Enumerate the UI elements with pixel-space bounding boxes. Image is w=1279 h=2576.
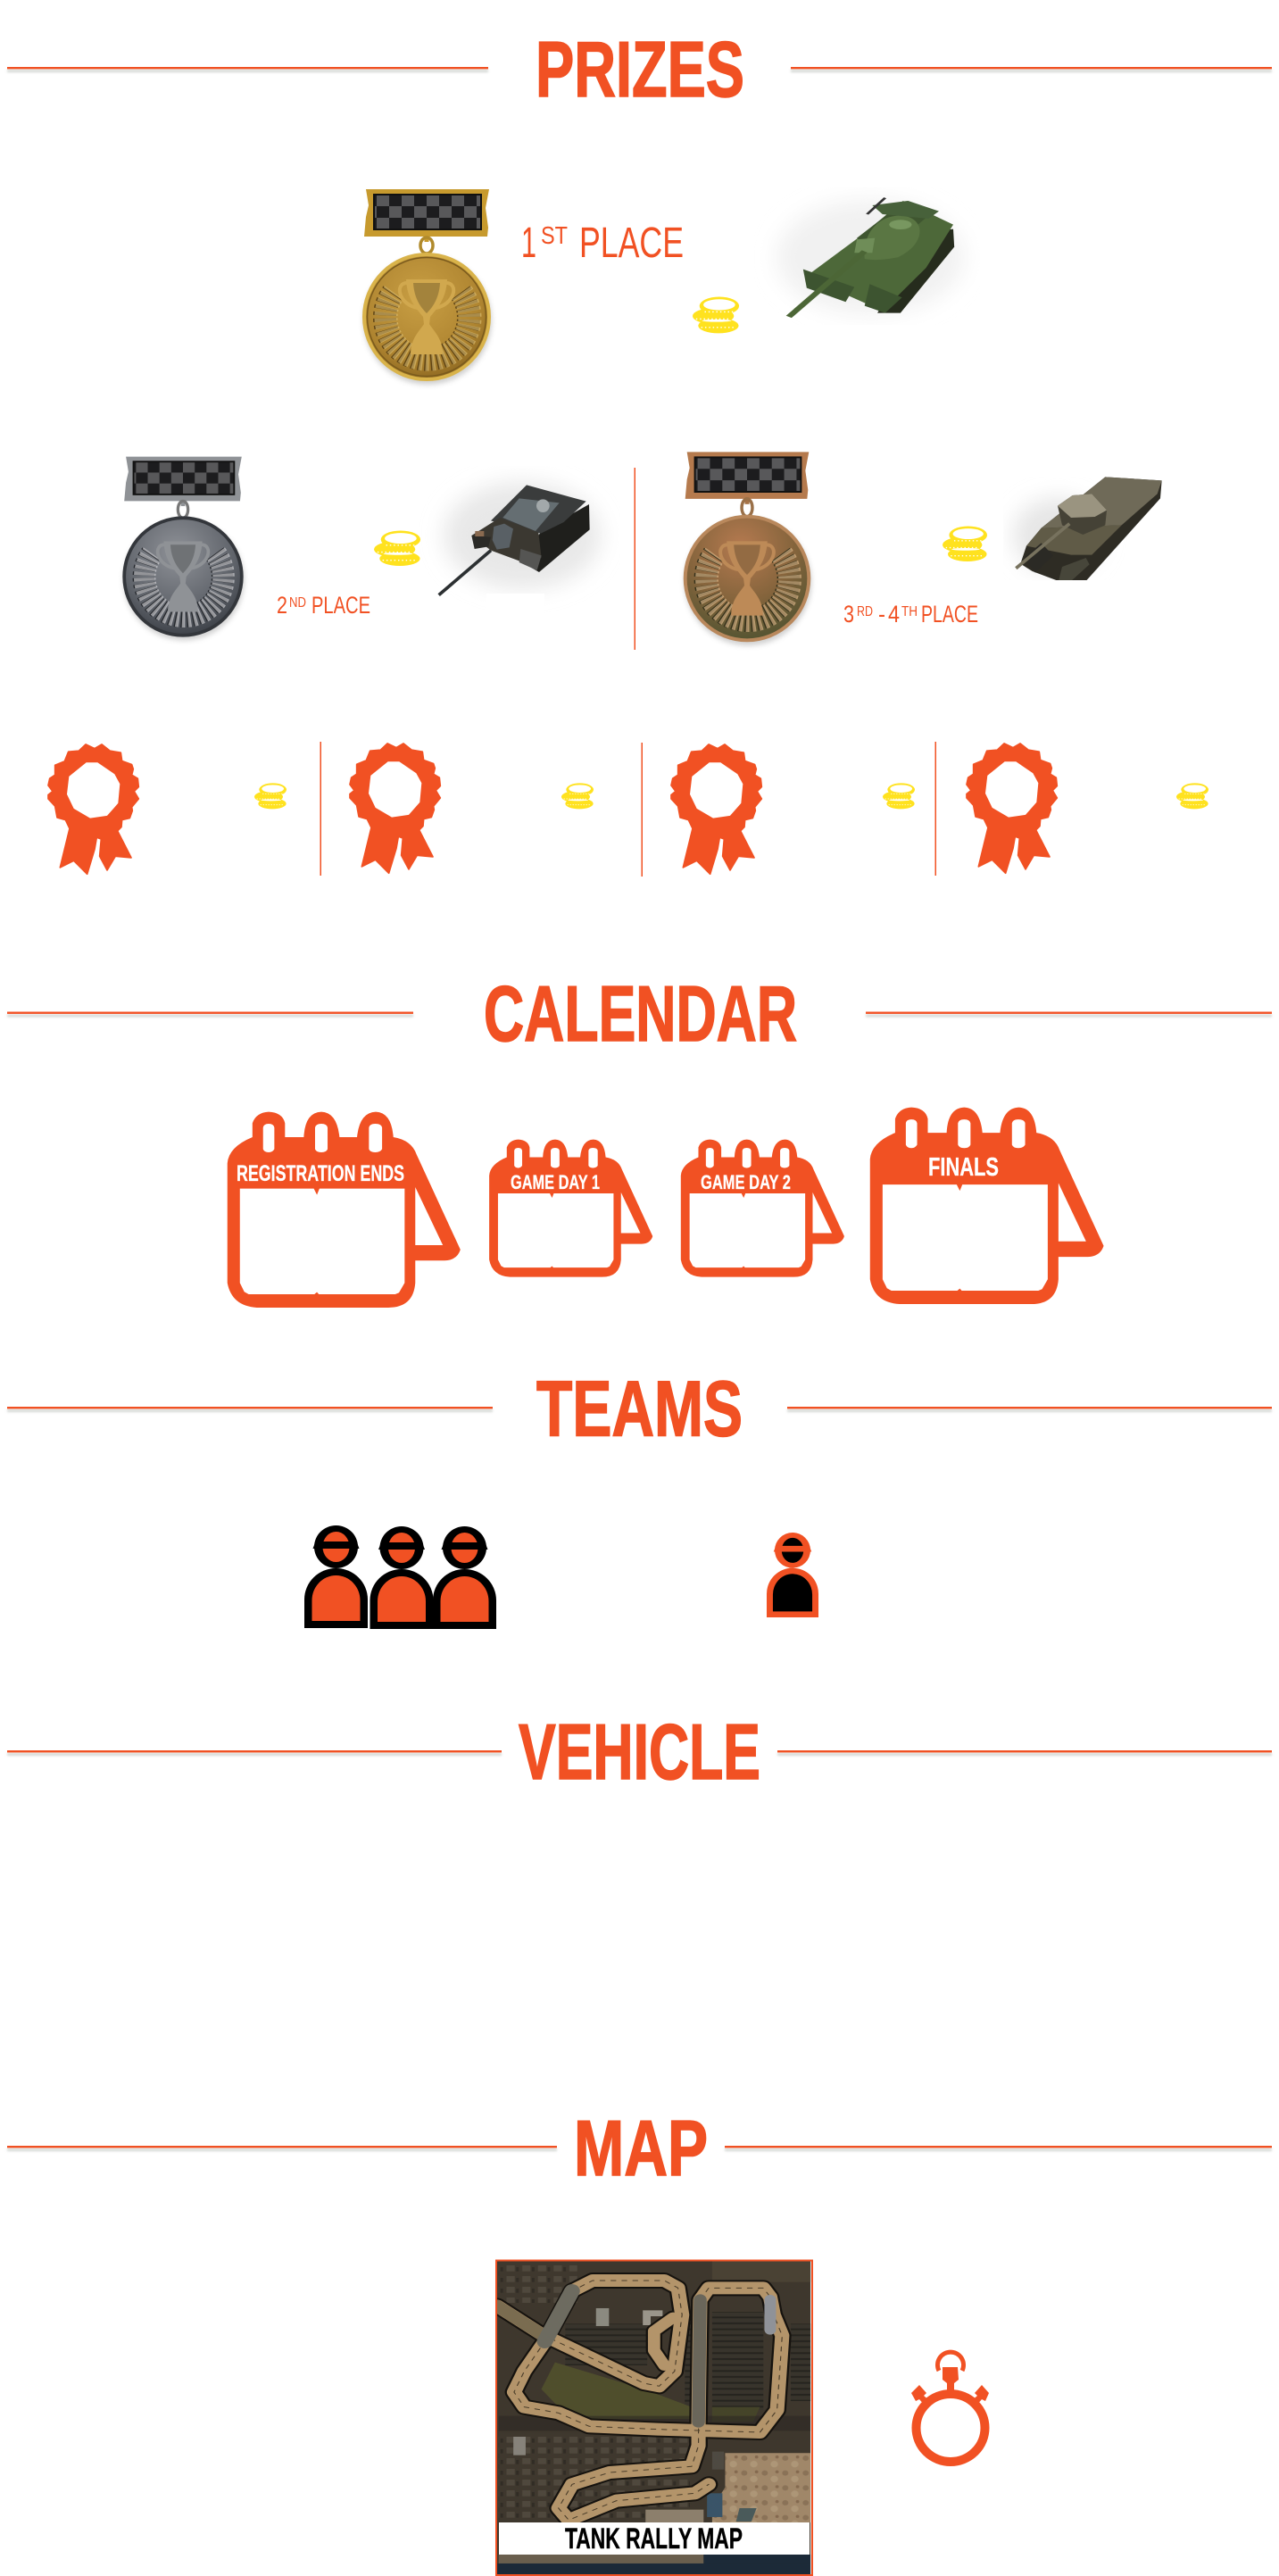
icon: team of three players: [304, 1525, 496, 1629]
label: 2nd place: PLACE: [311, 592, 370, 619]
tank image: first place: [780, 197, 960, 318]
coins 3: [883, 783, 915, 809]
heading: calendar: CALENDAR: [484, 969, 797, 1058]
label: 3rd to 4th place: 3: [843, 601, 854, 627]
rosette 1: [48, 744, 138, 874]
gold medal: [363, 189, 492, 385]
calendar: finals: FINALS: [928, 1153, 999, 1182]
heading: prizes: PRIZES: [536, 25, 744, 113]
player 1: [304, 1525, 368, 1628]
silver medal: [123, 457, 245, 640]
heading: vehicle: VEHICLE: [519, 1708, 760, 1796]
icon: gold coins: [943, 526, 987, 561]
heading: map: MAP: [574, 2104, 708, 2192]
tank image: third place: [1003, 477, 1163, 581]
heading: calendar: [7, 969, 1272, 1058]
player 2: [370, 1526, 434, 1629]
label: 2nd place: ND: [289, 595, 306, 611]
divider: [634, 468, 635, 650]
panel: 2nd place: [123, 457, 635, 650]
calendar: game day 1: [489, 1140, 652, 1277]
heading: teams: [7, 1364, 1272, 1453]
calendar: game day 2: [681, 1140, 844, 1277]
faint white tank name on image: [486, 594, 544, 613]
label: 3rd to 4th place: -: [878, 601, 885, 627]
coins 4: [1176, 783, 1208, 809]
rosette 2: [350, 744, 440, 873]
player 3: [433, 1526, 496, 1629]
heading: prizes: [7, 25, 1272, 113]
icon: single player: [767, 1533, 818, 1617]
label: 1st place: ST: [541, 221, 568, 249]
map track: [497, 2281, 782, 2520]
calendar: registration ends: REGISTRATION ENDS: [237, 1161, 404, 1186]
label: 1st place: PLACE: [579, 220, 684, 267]
calendar: finals: [870, 1108, 1104, 1304]
icon: gold coins: [693, 296, 739, 333]
calendar: registration ends: [228, 1112, 461, 1308]
label: 1st place: 1: [521, 220, 536, 267]
bronze medal: [685, 452, 811, 645]
label: 3rd to 4th place: [843, 601, 978, 627]
panel: 3rd-4th place: [685, 452, 1163, 645]
calendar: game day 2: GAME DAY 2: [701, 1171, 791, 1193]
label: 1st place: [521, 220, 684, 267]
map frame: [496, 2260, 812, 2575]
label: 3rd to 4th place: PLACE: [921, 601, 978, 627]
heading: teams: TEAMS: [536, 1364, 743, 1453]
map terrain: [496, 2261, 811, 2575]
label: 3rd to 4th place: RD: [857, 604, 873, 619]
label: 3rd to 4th place: TH: [901, 604, 918, 619]
icon: stopwatch: [911, 2352, 989, 2462]
rosette 3: [671, 744, 761, 874]
heading: map: [7, 2104, 1272, 2192]
coins 2: [561, 783, 594, 809]
label: 2nd place: 2: [277, 592, 287, 619]
icon: gold coins: [374, 530, 420, 566]
rosette 4: [967, 744, 1057, 873]
heading: vehicle: [7, 1708, 1272, 1796]
label: 2nd place: [277, 592, 370, 619]
coins 1: [254, 783, 287, 809]
map label: TANK RALLY MAP: [565, 2522, 743, 2555]
panel: 5th to 8th place rewards: [48, 742, 1208, 877]
map image: tank rally map: [494, 2258, 815, 2576]
label: 3rd to 4th place: 4: [888, 601, 900, 627]
panel: 1st place: [363, 187, 980, 385]
tank image: second place: [437, 478, 603, 596]
calendar: game day 1: GAME DAY 1: [511, 1171, 600, 1193]
